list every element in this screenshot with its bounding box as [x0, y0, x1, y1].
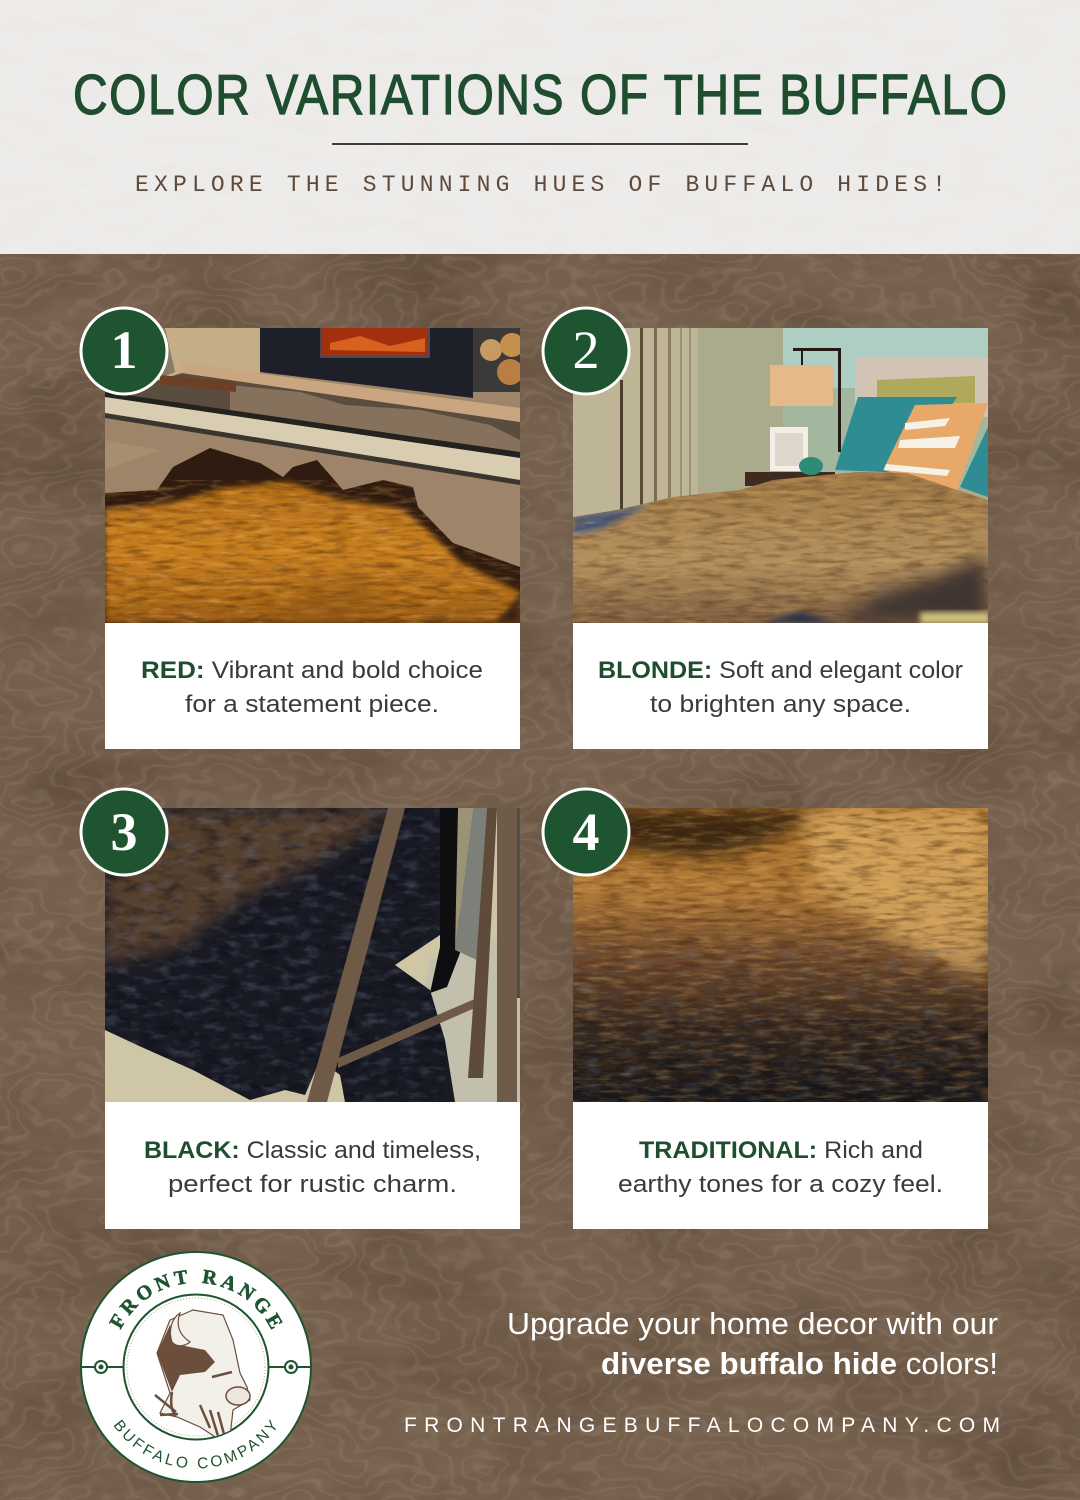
caption: blonde: to brighten any space. — [650, 691, 911, 718]
logo text: Buffalo Company: BUFFALO COMPANY — [114, 1419, 276, 1468]
caption: red: RED: Vibrant and bold choice — [141, 657, 483, 684]
badge: number 4: 4 — [572, 802, 600, 862]
badge: number 2 — [543, 308, 629, 394]
website url: FRONTRANGEBUFFALOCOMPANY.COM — [404, 1414, 1000, 1437]
caption: red — [105, 623, 520, 749]
title divider — [332, 143, 748, 145]
panel: red hide — [81, 308, 524, 749]
call to action: Upgrade your home decor with our — [507, 1306, 998, 1341]
badge: number 1 — [81, 308, 167, 394]
badge: number 4 — [543, 789, 629, 875]
photo: blonde hide on bed — [573, 328, 990, 624]
panel: black hide — [81, 789, 520, 1229]
caption: traditional: earthy tones for a cozy feel. — [618, 1171, 943, 1198]
call to action: diverse buffalo hide colors! — [601, 1346, 998, 1381]
panel: traditional hide — [543, 789, 988, 1229]
badge: number 3: 3 — [110, 802, 138, 862]
caption: blonde — [573, 623, 988, 749]
title: COLOR VARIATIONS OF THE BUFFALO — [73, 63, 1007, 127]
badge: number 3 — [81, 789, 167, 875]
photo: red hide by fireplace — [105, 328, 524, 623]
logo text: Front Range: FRONT RANGE — [108, 1269, 283, 1330]
photo: black hide under chair — [105, 808, 520, 1102]
badge: number 1: 1 — [110, 320, 138, 380]
logo: bison head — [155, 1310, 250, 1440]
caption: black: BLACK: Classic and timeless, — [144, 1137, 481, 1164]
badge: number 2: 2 — [572, 320, 600, 380]
caption: black — [105, 1102, 520, 1229]
caption: red: for a statement piece. — [185, 691, 439, 718]
panel: blonde hide — [543, 308, 990, 749]
header band — [0, 0, 1080, 254]
logo connectors — [81, 1361, 311, 1373]
photo: traditional fur close-up — [573, 808, 988, 1102]
logo: Front Range Buffalo Company — [80, 1251, 312, 1483]
call to action — [507, 1306, 998, 1381]
caption: blonde: BLONDE: Soft and elegant color — [598, 657, 963, 684]
caption: black: perfect for rustic charm. — [168, 1171, 457, 1198]
subtitle: EXPLORE THE STUNNING HUES OF BUFFALO HIDES! — [135, 172, 946, 198]
caption: traditional — [573, 1102, 988, 1229]
caption: traditional: TRADITIONAL: Rich and — [639, 1137, 923, 1164]
